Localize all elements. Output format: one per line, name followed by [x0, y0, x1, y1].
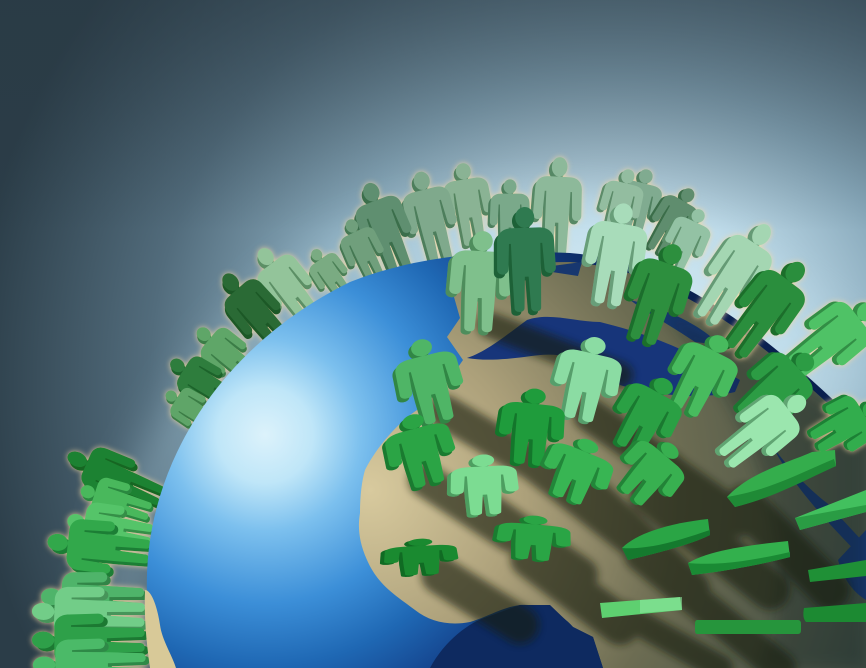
person [58, 435, 174, 521]
person [634, 178, 709, 264]
person [597, 363, 694, 467]
people at the far right, glowing against the sky [679, 209, 866, 467]
person [32, 614, 149, 668]
person [708, 245, 824, 372]
person [798, 382, 866, 467]
person [44, 515, 156, 582]
people behind the globe limb [31, 156, 720, 668]
person [384, 332, 472, 433]
person [530, 426, 622, 515]
ocean sphere [147, 252, 866, 668]
person [156, 378, 227, 441]
person [574, 198, 654, 313]
person [375, 406, 464, 497]
foreshortened person, long diagonal [727, 450, 836, 507]
foreshortened person, right edge [795, 490, 866, 530]
foreshortened person, far right [808, 560, 866, 582]
person [330, 212, 396, 293]
shade on the far land [660, 310, 866, 668]
sea: dark ocean at Gulf of Guinea shade [430, 605, 603, 668]
person [607, 164, 668, 247]
person [589, 164, 649, 247]
person [159, 344, 249, 422]
person [528, 156, 584, 260]
person [542, 329, 629, 430]
person [488, 179, 530, 254]
person [342, 174, 426, 285]
person [379, 537, 459, 578]
flat person, right bar [803, 603, 866, 622]
foreshortened person, lower middle [688, 541, 790, 575]
flat person, lower bar [695, 620, 801, 634]
sea: Mediterranean [467, 317, 740, 396]
person [652, 321, 750, 429]
person [33, 639, 150, 668]
person [773, 281, 866, 392]
person [492, 206, 558, 317]
foreshortened person, middle [622, 519, 710, 560]
person [721, 332, 832, 442]
sea: Red Sea and northern seas [552, 262, 866, 600]
people standing on the globe [375, 198, 866, 634]
person [679, 209, 790, 337]
person [298, 240, 362, 310]
person [602, 423, 698, 520]
person [491, 512, 573, 565]
land: South America edge [145, 590, 176, 668]
person [610, 234, 703, 355]
person [184, 314, 271, 397]
person [31, 585, 150, 644]
person [445, 453, 520, 519]
person [40, 570, 148, 629]
person [74, 470, 158, 534]
halo around the globe limb [119, 224, 866, 668]
person [393, 166, 467, 272]
land: Africa and Europe [359, 262, 866, 668]
flat person, bright bar [600, 597, 682, 618]
person [492, 385, 568, 471]
person [205, 260, 308, 367]
person [443, 229, 514, 337]
person [704, 375, 821, 483]
person [63, 497, 159, 561]
globe [145, 252, 866, 668]
cast shadows [425, 325, 830, 668]
person [240, 235, 335, 340]
person [650, 200, 720, 283]
person [436, 160, 498, 252]
